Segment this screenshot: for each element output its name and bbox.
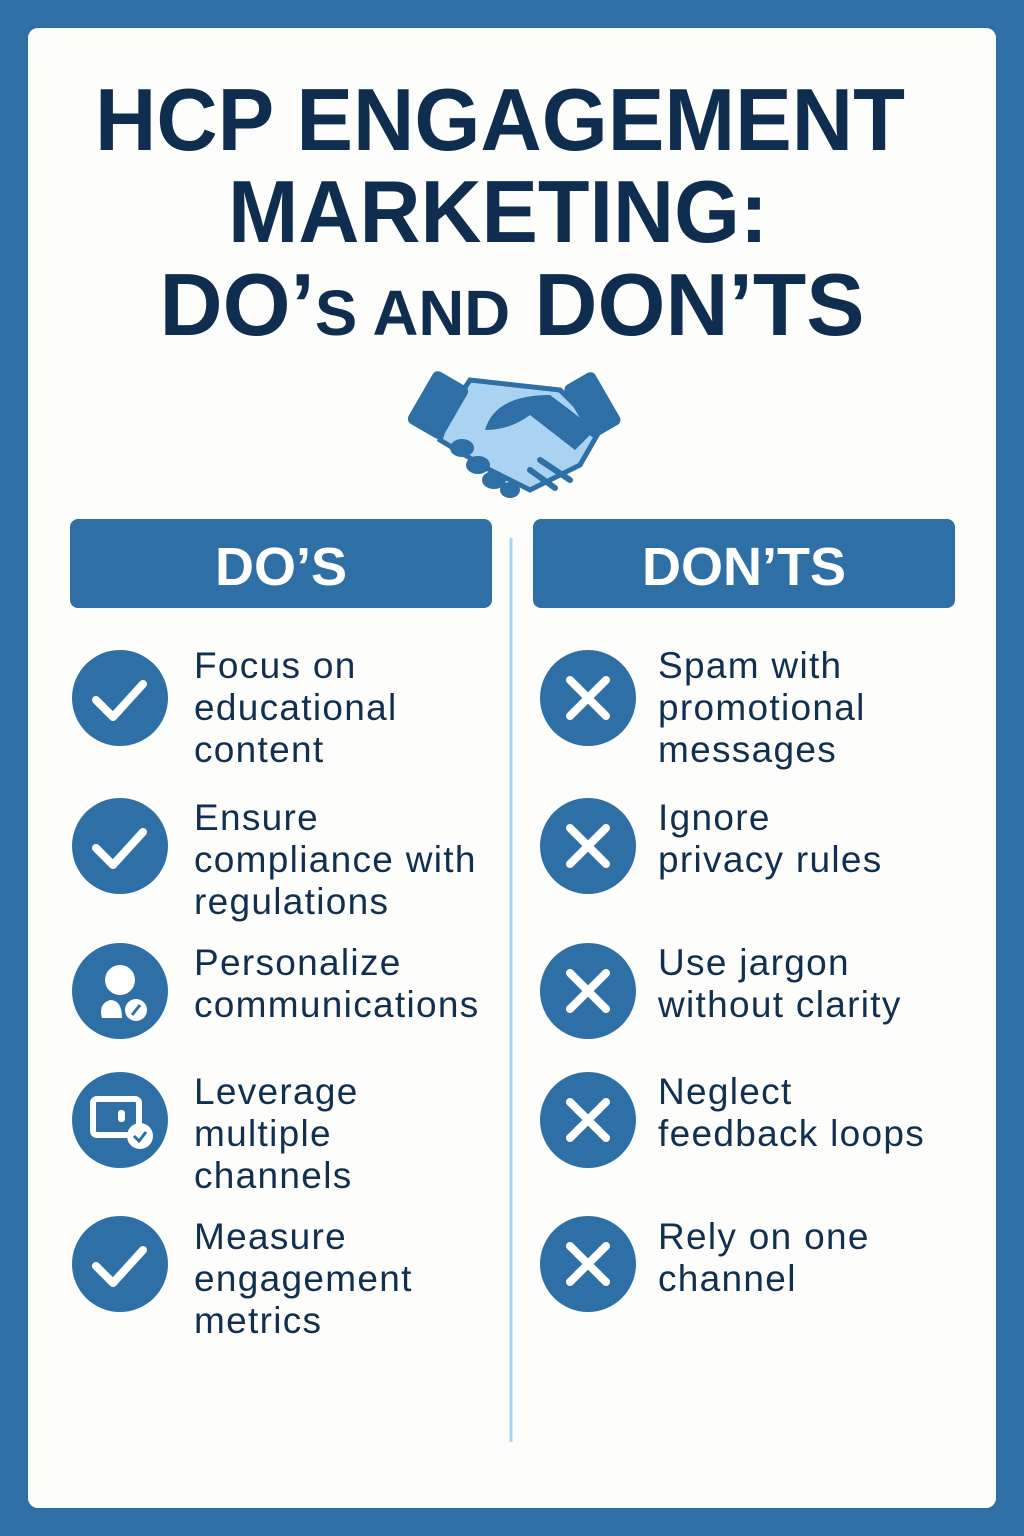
- dont 5: [540, 1216, 870, 1312]
- do 4: Leverage: [194, 1071, 359, 1112]
- do 1: educational: [194, 687, 398, 728]
- do 1: content: [194, 729, 324, 770]
- do 4: [72, 1071, 359, 1196]
- header: DO'S: DO’S: [215, 537, 347, 597]
- do 1: [72, 645, 398, 770]
- header: DO'S: [70, 519, 492, 608]
- do 4: multiple: [194, 1113, 332, 1154]
- do 5: [72, 1216, 413, 1341]
- header: DON'TS: [533, 519, 955, 608]
- dont 1: messages: [658, 729, 837, 770]
- dont items: [540, 645, 925, 1312]
- do 3: Personalize: [194, 942, 402, 983]
- do 5: metrics: [194, 1300, 322, 1341]
- dont 1: Spam with: [658, 645, 842, 686]
- dont 5: channel: [658, 1258, 797, 1299]
- title: [95, 70, 905, 354]
- title: HCP ENGAGEMENT: [95, 70, 905, 169]
- dont 5: Rely on one: [658, 1216, 870, 1257]
- do 2: [72, 797, 477, 922]
- dont 1: [540, 645, 866, 770]
- dont 4: [540, 1071, 925, 1168]
- dont 3: without clarity: [657, 984, 902, 1025]
- do 4: channels: [194, 1155, 353, 1196]
- title: DO’S AND DON’TS: [160, 255, 864, 354]
- do 3: communications: [194, 984, 480, 1025]
- do 5: Measure: [194, 1216, 347, 1257]
- do 3: [72, 942, 480, 1039]
- dont 3: Use jargon: [658, 942, 850, 983]
- dont 4: Neglect: [658, 1071, 793, 1112]
- title: MARKETING:: [228, 162, 768, 261]
- dont 2: [540, 797, 883, 894]
- do items: [72, 645, 480, 1341]
- dont 4: feedback loops: [658, 1113, 925, 1154]
- dont 1: promotional: [658, 687, 866, 728]
- dont 2: privacy rules: [658, 839, 883, 880]
- icon: handshake: [406, 369, 623, 498]
- do 2: Ensure: [194, 797, 319, 838]
- dont 2: Ignore: [658, 797, 771, 838]
- dont 3: [540, 942, 902, 1039]
- do 2: regulations: [194, 881, 389, 922]
- do 2: compliance with: [194, 839, 477, 880]
- header: DON'TS: DON’TS: [642, 537, 846, 597]
- do 1: Focus on: [194, 645, 357, 686]
- do 5: engagement: [194, 1258, 413, 1299]
